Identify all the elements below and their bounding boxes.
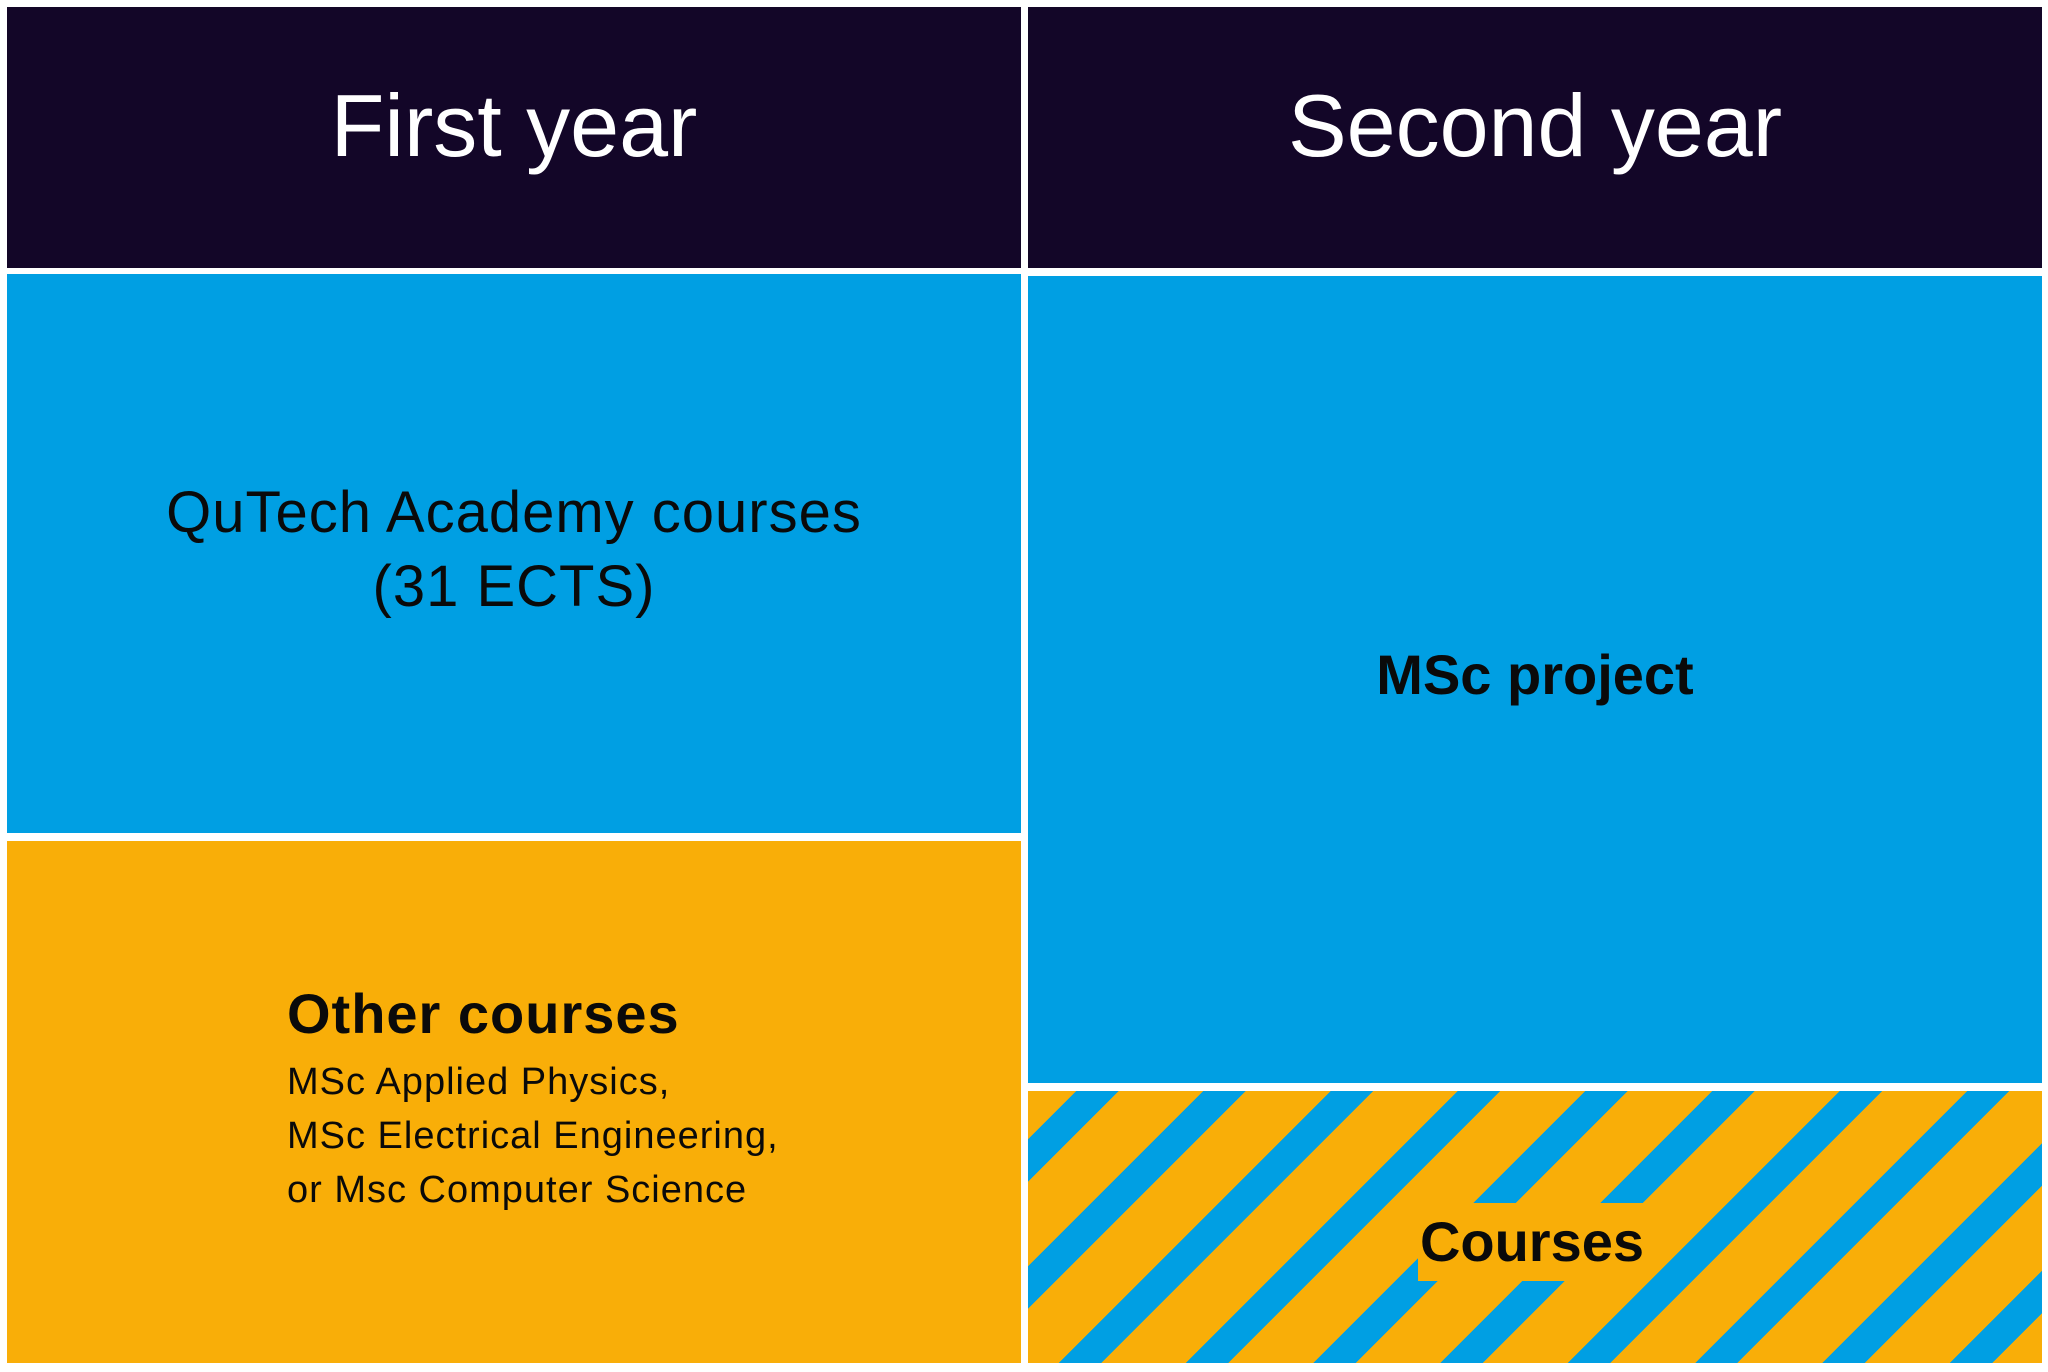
text: QuTech courses: [166, 480, 862, 619]
header: second year: Second year: [1288, 76, 1782, 174]
text: QuTech courses: (31 ECTS): [373, 554, 655, 619]
text: QuTech courses: QuTech Academy courses: [166, 480, 862, 545]
panel: other courses: [7, 841, 1021, 1363]
header: second year: [1028, 7, 2042, 268]
text: other courses: Other courses: [287, 982, 680, 1045]
text: courses: Courses: [1420, 1210, 1644, 1273]
panel: second-year courses (striped): [1028, 1091, 2042, 1363]
text: other courses: MSc Electrical Engineering,: [287, 1115, 779, 1157]
header: first year: First year: [331, 76, 697, 174]
text: MSc project: MSc project: [1376, 643, 1694, 706]
text: other courses: or Msc Computer Science: [287, 1169, 747, 1211]
panel: MSc project: [1028, 276, 2042, 1083]
text: other courses: [287, 982, 779, 1211]
text: other courses: MSc Applied Physics,: [287, 1061, 670, 1103]
header: first year: [7, 7, 1021, 268]
panel: QuTech Academy courses: [7, 274, 1021, 833]
